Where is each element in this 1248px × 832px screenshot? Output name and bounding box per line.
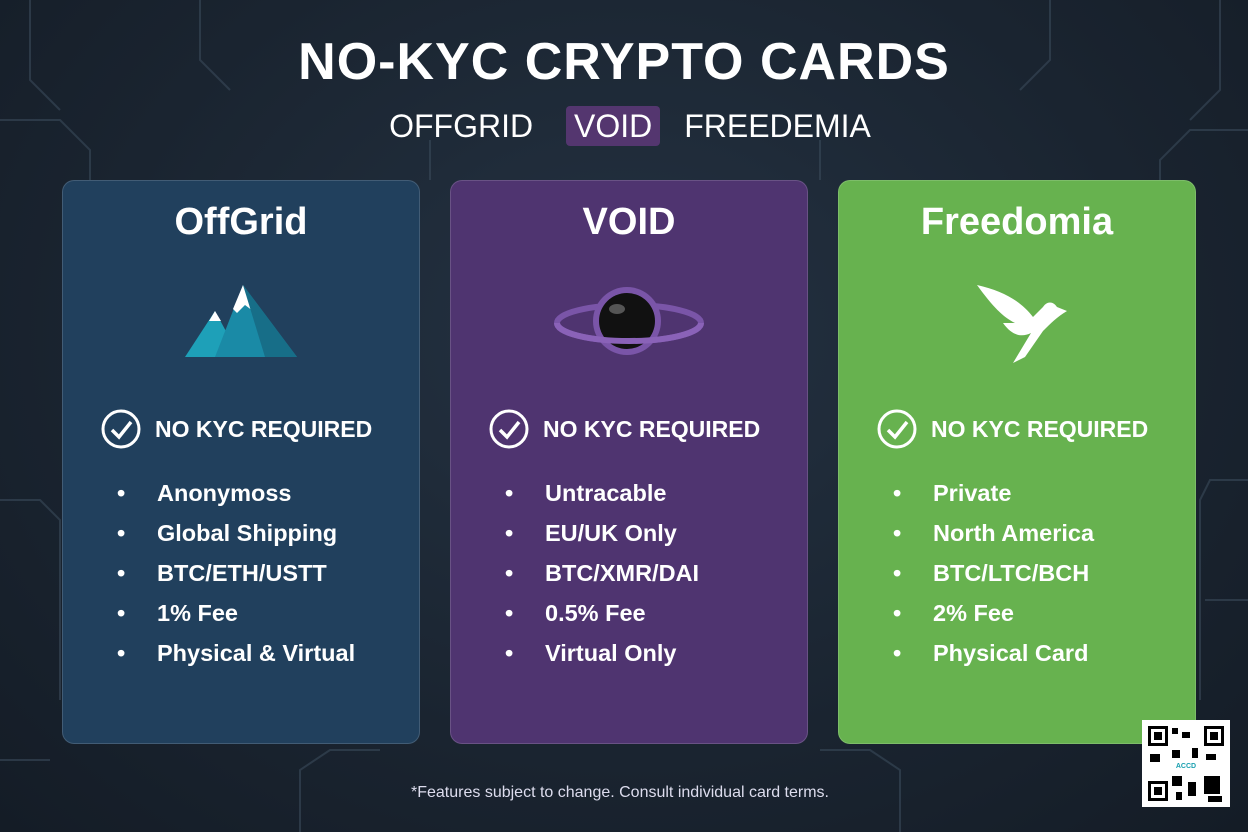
subtitle: OFFGRID VOID FREEDEMIA [389, 108, 871, 144]
features list: Virtual Only [545, 640, 676, 666]
features list: 1% Fee [157, 600, 238, 626]
features list: Physical Card [933, 640, 1088, 666]
features list: BTC/XMR/DAI [545, 560, 699, 586]
features list: Private [933, 480, 1011, 506]
features list [894, 480, 1094, 666]
features list: 0.5% Fee [545, 600, 646, 626]
check: no kyc [102, 410, 372, 448]
check: no kyc: NO KYC REQUIRED [543, 416, 760, 442]
check: no kyc [490, 410, 760, 448]
features list: Physical & Virtual [157, 640, 355, 666]
check: no kyc: NO KYC REQUIRED [155, 416, 372, 442]
features list: 2% Fee [933, 600, 1014, 626]
features list: BTC/LTC/BCH [933, 560, 1089, 586]
footer note: *Features subject to change. Consult individual card terms. [411, 784, 829, 801]
icon: black hole [554, 287, 704, 355]
panel: OffGrid [62, 180, 420, 744]
QR code: ACCD [1176, 763, 1196, 770]
features list: Anonymoss [157, 480, 292, 506]
icon: dove [977, 285, 1067, 363]
check: no kyc [878, 410, 1148, 448]
check: no kyc: NO KYC REQUIRED [931, 416, 1148, 442]
panel: VOID [450, 180, 808, 744]
icon: mountain [185, 285, 297, 357]
features list [506, 480, 699, 666]
features list: EU/UK Only [545, 520, 677, 546]
panel: OffGrid: OffGrid [174, 201, 307, 243]
features list: Untracable [545, 480, 666, 506]
features list: Global Shipping [157, 520, 337, 546]
features list: BTC/ETH/USTT [157, 560, 327, 586]
title: NO-KYC CRYPTO CARDS [298, 33, 950, 91]
features list [118, 480, 355, 666]
panel: Freedomia: Freedomia [921, 201, 1113, 243]
panel: Freedomia [838, 180, 1196, 744]
panel: VOID: VOID [583, 201, 675, 243]
QR code [1142, 720, 1230, 807]
features list: North America [933, 520, 1094, 546]
